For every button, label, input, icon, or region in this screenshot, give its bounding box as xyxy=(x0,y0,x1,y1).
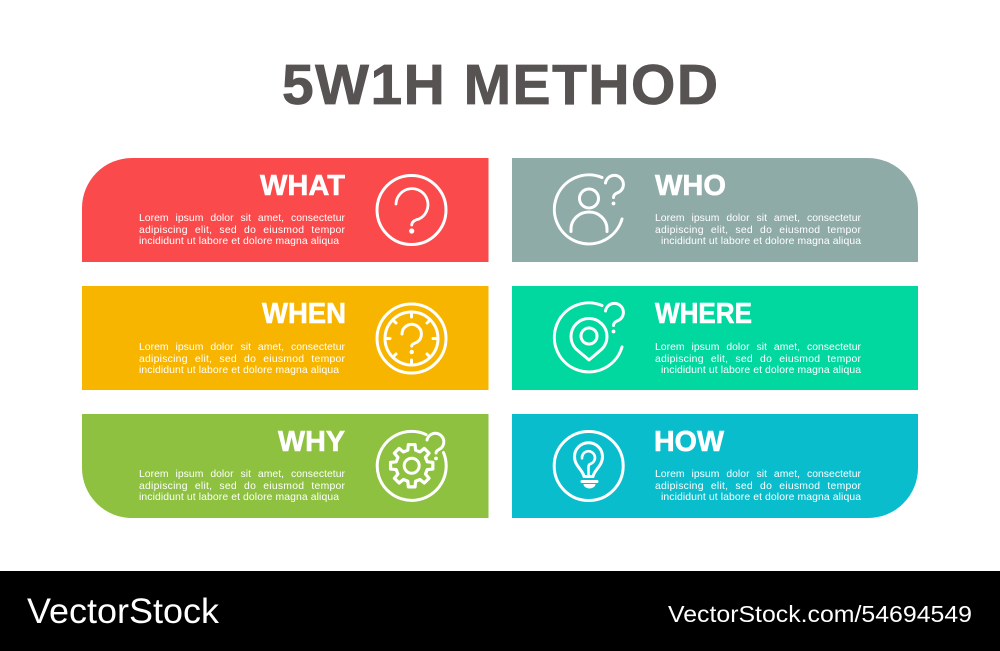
text block: how: adipiscing elit, sed do eiusmod tempor xyxy=(655,481,862,492)
text block: how: incididunt ut labore et dolore magna aliqua xyxy=(661,492,861,503)
text block: what: adipiscing elit, sed do eiusmod tempor xyxy=(139,225,346,236)
heading: where: WHERE xyxy=(655,298,752,330)
text block: where: Lorem ipsum dolor sit amet, consectetur xyxy=(655,342,862,353)
icon: question mark xyxy=(377,176,446,244)
text block: when xyxy=(139,342,346,376)
panel: how xyxy=(512,414,918,518)
icon: gear with question mark xyxy=(377,431,446,500)
heading: what: WHAT xyxy=(260,170,345,202)
footer bar xyxy=(0,571,1000,651)
text block: who: Lorem ipsum dolor sit amet, consectetur xyxy=(655,213,862,224)
panel: why xyxy=(82,414,488,518)
heading: how: HOW xyxy=(654,426,725,458)
panel: what xyxy=(82,158,488,262)
text block: why: incididunt ut labore et dolore magna aliqua xyxy=(139,492,339,503)
icon: clock with question mark xyxy=(377,304,446,373)
text block: why: adipiscing elit, sed do eiusmod tempor xyxy=(139,481,346,492)
icon: person with question mark xyxy=(554,175,623,244)
text block: when: Lorem ipsum dolor sit amet, consectetur xyxy=(139,342,346,353)
text block: why: Lorem ipsum dolor sit amet, consectetur xyxy=(139,469,346,480)
text block: where xyxy=(655,342,862,376)
footer logo text: VectorStock xyxy=(27,592,220,631)
panel: when xyxy=(82,286,488,390)
text block: when: incididunt ut labore et dolore magna aliqua xyxy=(139,365,339,376)
heading: why: WHY xyxy=(278,426,345,458)
footer image id: VectorStock.com/54694549 xyxy=(668,601,972,627)
text block: who: adipiscing elit, sed do eiusmod tempor xyxy=(655,225,862,236)
text block: why xyxy=(139,469,346,503)
text block: who xyxy=(655,213,862,247)
panel: where xyxy=(512,286,918,390)
heading: when: WHEN xyxy=(262,298,346,330)
text block: what: incididunt ut labore et dolore magna aliqua xyxy=(139,236,339,247)
heading: who: WHO xyxy=(655,170,726,202)
text block: where: adipiscing elit, sed do eiusmod tempor xyxy=(655,354,862,365)
text block: how xyxy=(655,469,862,503)
text block: when: adipiscing elit, sed do eiusmod tempor xyxy=(139,354,346,365)
title: 5W1H METHOD xyxy=(282,53,718,117)
panel: who xyxy=(512,158,918,262)
text block: who: incididunt ut labore et dolore magna aliqua xyxy=(661,236,861,247)
text block: how: Lorem ipsum dolor sit amet, consectetur xyxy=(655,469,862,480)
text block: what: Lorem ipsum dolor sit amet, consectetur xyxy=(139,213,346,224)
icon: light bulb with question mark xyxy=(554,432,623,500)
text block: where: incididunt ut labore et dolore magna aliqua xyxy=(661,365,861,376)
text block: what xyxy=(139,213,346,247)
icon: map pin with question mark xyxy=(554,303,623,372)
